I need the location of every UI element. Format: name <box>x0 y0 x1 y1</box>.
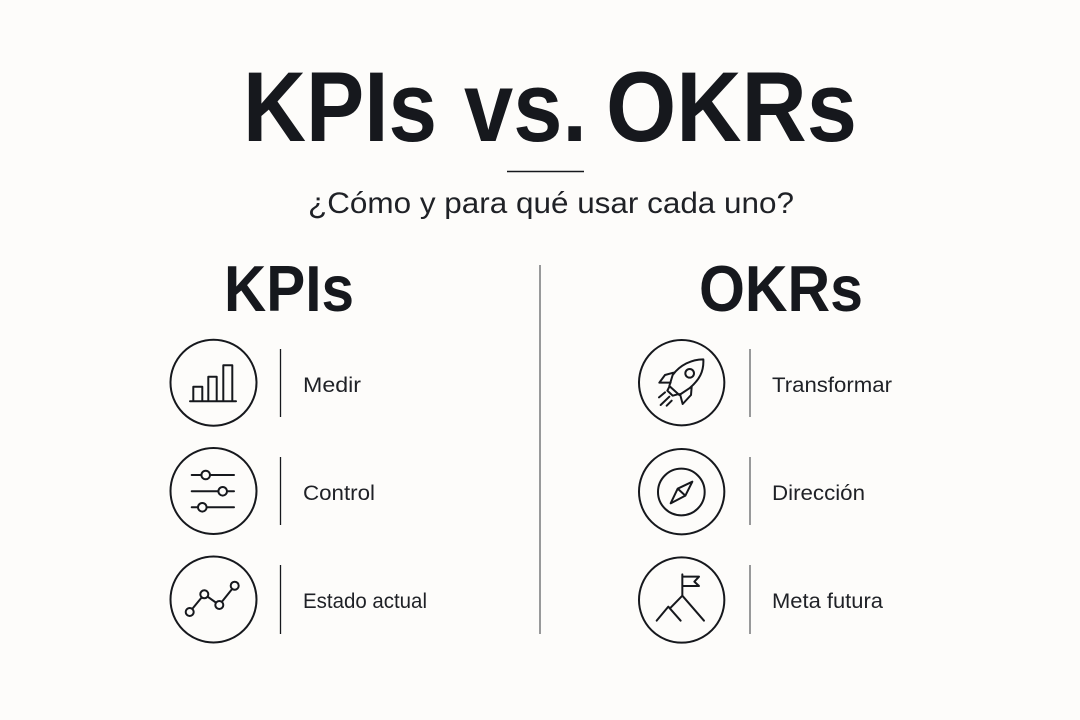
label: Transformar: Transformar <box>772 374 892 397</box>
heading: KPIs: KPIs <box>224 252 354 325</box>
title: vs. <box>464 51 587 162</box>
icon: line chart <box>170 556 256 642</box>
label: Meta futura: Meta futura <box>772 590 883 613</box>
label: Estado actual: Estado actual <box>303 590 427 613</box>
icon: compass <box>639 449 724 534</box>
label: Medir: Medir <box>303 374 361 397</box>
item: Control <box>170 448 375 534</box>
icon: sliders <box>170 448 256 534</box>
label: Control: Control <box>303 482 375 505</box>
item: Transformar <box>639 340 892 425</box>
title: OKRs <box>606 51 857 162</box>
label: Dirección: Dirección <box>772 482 865 505</box>
icon: mountain flag <box>639 557 724 643</box>
panel: KPIs <box>170 252 427 642</box>
panel: OKRs <box>639 252 892 643</box>
item: Medir <box>170 340 361 426</box>
title: KPIs <box>243 51 437 162</box>
icon: bar chart <box>170 340 256 426</box>
title <box>243 51 857 162</box>
item: Meta futura <box>639 557 883 643</box>
subtitle: ¿Cómo y para qué usar cada uno? <box>308 187 794 220</box>
heading: OKRs: OKRs <box>699 252 863 325</box>
item: Dirección <box>639 449 865 534</box>
icon: rocket <box>639 340 724 425</box>
item: Estado actual <box>170 556 427 642</box>
